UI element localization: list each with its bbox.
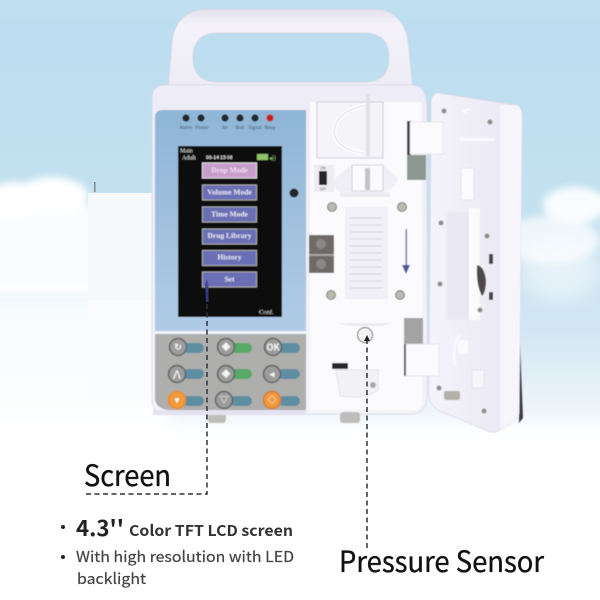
keypad bbox=[155, 334, 306, 410]
keypad glyphs: ⋀ bbox=[172, 367, 181, 380]
text block: screen features bbox=[61, 511, 294, 589]
screen menu buttons: Drop Mode bbox=[211, 166, 249, 174]
screen menu buttons: Volume Mode bbox=[207, 188, 252, 196]
screen menu buttons: History bbox=[217, 252, 242, 262]
screen menu buttons: Time Mode bbox=[211, 210, 249, 218]
keypad glyphs: ◆ bbox=[221, 367, 231, 380]
indicator lights: Signal bbox=[248, 124, 262, 131]
keypad labels bbox=[182, 343, 300, 406]
keypad glyphs: ◇ bbox=[267, 393, 277, 406]
screen menu buttons bbox=[202, 163, 256, 287]
on/off switch: ON bbox=[320, 166, 326, 172]
text block: screen features: backlight bbox=[77, 568, 146, 589]
screen menu buttons: Drug Library bbox=[208, 231, 252, 240]
on/off switch: OFF bbox=[320, 188, 326, 192]
lower clamp bbox=[332, 363, 378, 397]
heading: Pressure Sensor: Pressure Sensor bbox=[339, 539, 545, 581]
side sensor dot bbox=[290, 188, 298, 198]
indicator lights: Air bbox=[222, 124, 228, 131]
keypad glyphs: ↻ bbox=[174, 340, 182, 353]
mounting screws bbox=[326, 202, 406, 300]
upper clamp bbox=[310, 94, 422, 197]
screen pointer arrowhead bbox=[205, 279, 208, 302]
text block: screen features: Color TFT LCD screen bbox=[129, 520, 293, 541]
keypad glyphs: ▽ bbox=[219, 393, 229, 406]
LCD screen: 08-14 15 08 bbox=[206, 154, 233, 161]
open door bbox=[429, 93, 523, 432]
keypad glyphs: ◆ bbox=[221, 340, 231, 353]
LCD screen: Main bbox=[180, 148, 193, 154]
screen callout leader line bbox=[85, 287, 207, 494]
keypad glyphs: ◂ bbox=[269, 367, 275, 380]
device handle bbox=[168, 9, 413, 90]
text block: screen features: 4.3'' bbox=[76, 511, 124, 543]
white patch beside device bbox=[88, 193, 158, 323]
keypad glyphs bbox=[172, 340, 280, 406]
keypad buttons bbox=[168, 338, 282, 408]
indicator lights bbox=[180, 114, 276, 131]
panel: blue front panel bbox=[155, 110, 306, 331]
pump body bbox=[152, 85, 427, 423]
heading: Screen: Screen bbox=[84, 453, 171, 495]
indicator lights: Bolt bbox=[236, 125, 245, 131]
bottom hinge bbox=[404, 318, 439, 376]
top hinge bbox=[407, 121, 443, 180]
pressure sensor port bbox=[338, 323, 392, 342]
indicator lights: Power bbox=[195, 125, 209, 131]
keypad glyphs: OK bbox=[266, 340, 280, 354]
door screws bbox=[436, 108, 492, 414]
on/off switch bbox=[314, 165, 334, 192]
LCD screen: Conf. bbox=[259, 309, 274, 316]
stray tick mark bbox=[94, 182, 96, 192]
keypad glyphs: ▾ bbox=[174, 393, 180, 406]
metal contact plates bbox=[309, 235, 334, 273]
infusion pump bbox=[152, 9, 523, 432]
LCD screen: ◂)) bbox=[269, 153, 276, 162]
direction arrow bbox=[402, 229, 410, 274]
LCD screen: Adult bbox=[182, 156, 196, 162]
text block: screen features: With high resolution with LED bbox=[76, 546, 294, 567]
indicator lights: Alarm bbox=[180, 125, 192, 131]
plunger scale bbox=[345, 207, 388, 299]
indicator lights: Beep bbox=[265, 125, 276, 131]
pressure sensor leader line bbox=[366, 338, 368, 548]
LCD screen bbox=[178, 146, 282, 317]
screen menu buttons: Set bbox=[224, 274, 235, 284]
panel: syringe compartment bbox=[309, 94, 422, 410]
pressure sensor pointer arrowhead bbox=[364, 335, 370, 341]
door latch parts bbox=[444, 108, 495, 400]
